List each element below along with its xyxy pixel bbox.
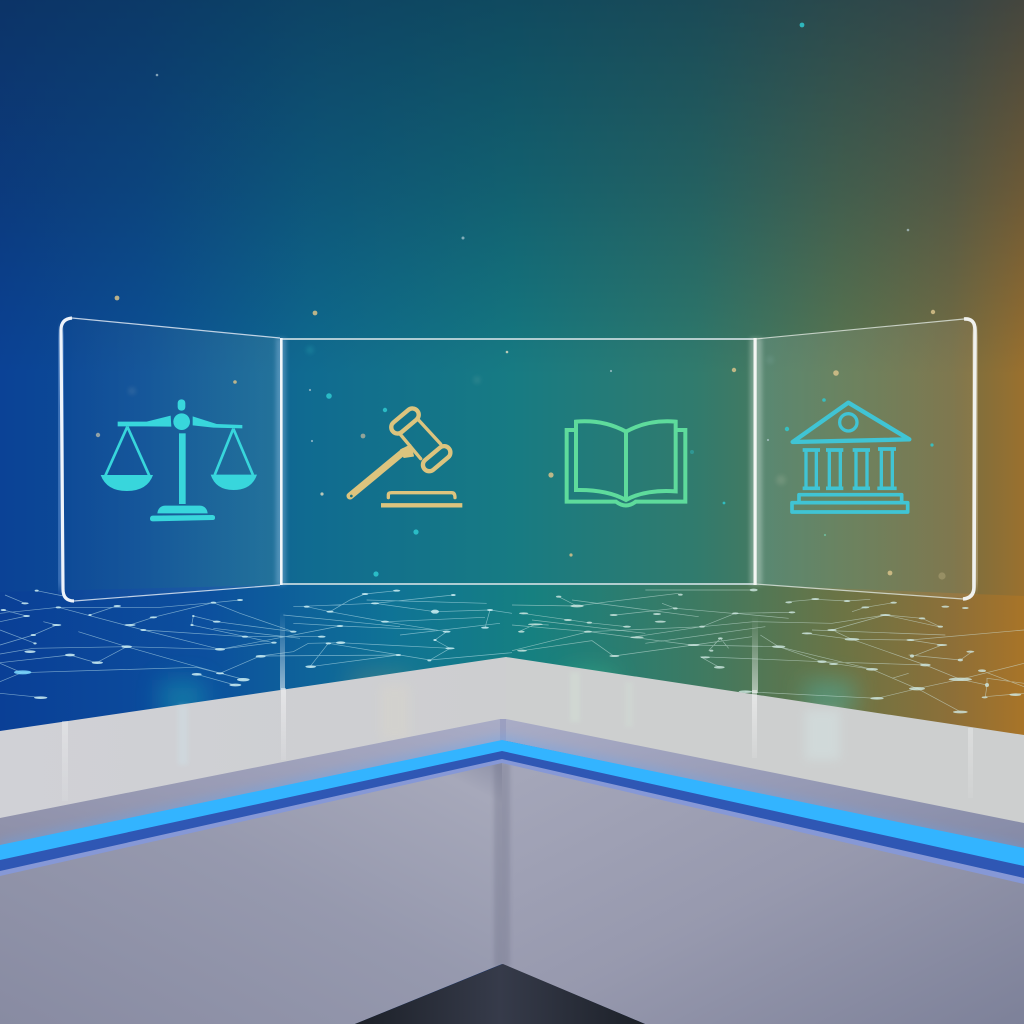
bright LED line [0,740,1024,866]
floor surface [0,585,1024,740]
dark blue recess [0,748,1024,879]
icon: open book [567,421,685,505]
blue LED light strip [0,740,1024,884]
icon: scales of justice [101,399,257,521]
counter right surface [506,657,1024,824]
background gradient wall [0,0,1024,740]
dark floor gap [355,964,645,1024]
network left half [0,590,512,699]
floor colour reflections [160,670,855,720]
panel: left glass pane [60,318,280,601]
wall right face [502,762,1024,1024]
icon: courthouse [792,403,909,512]
lower light lip [0,759,1024,884]
wall left face [0,762,502,1024]
pane divider left [276,338,286,585]
panel: centre glass pane [281,339,755,584]
glowing floor with network [0,585,1024,740]
corner shadow [494,762,510,967]
counter reflections [62,672,973,801]
icon: gavel [350,406,462,505]
lower wall [0,762,1024,1024]
LED glow [0,745,1024,856]
pane divider right [750,338,762,585]
network right half [512,589,1024,713]
counter fascia bevel [0,719,1024,849]
floating particles [96,23,946,580]
counter left surface [0,657,506,820]
panel: right glass pane [755,319,976,599]
floor pane streaks [280,612,758,693]
white counter top [0,657,1024,824]
